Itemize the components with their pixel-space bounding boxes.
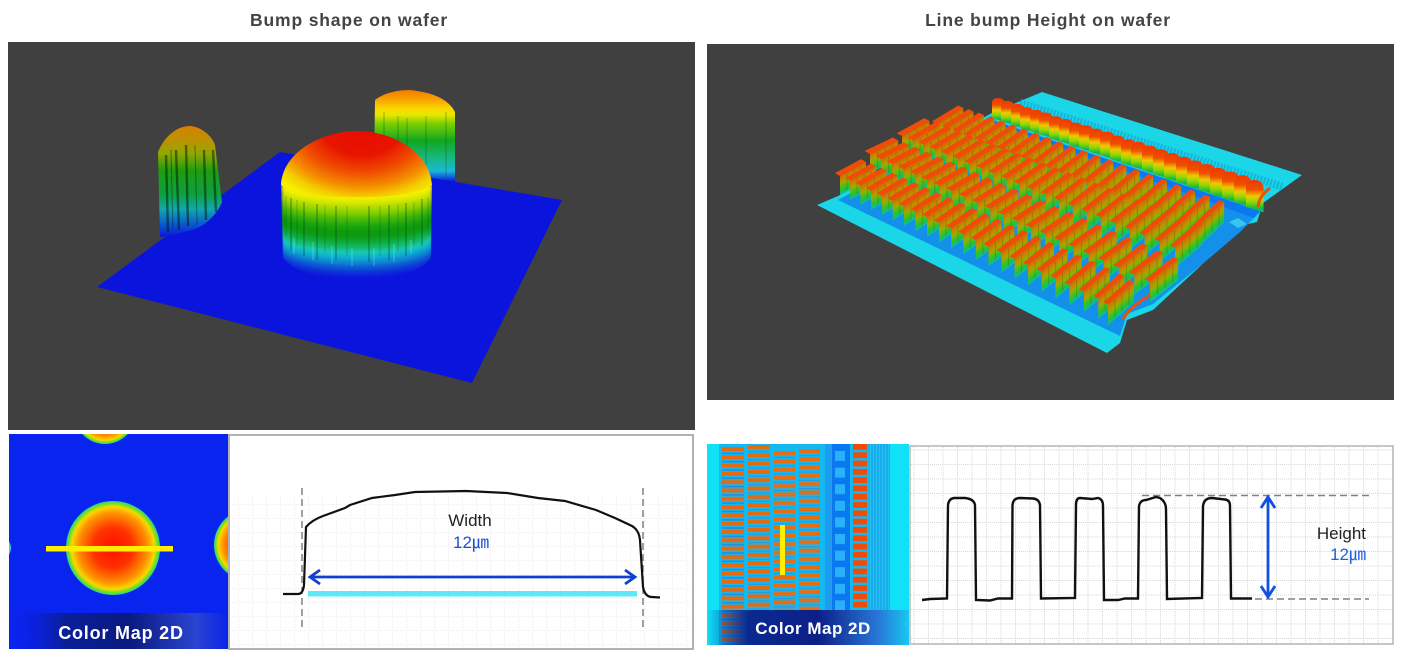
orange bump columns [722,445,820,645]
height guide lines [1142,496,1369,599]
end curl, top row [1258,188,1270,207]
yellow scan line [46,546,173,552]
panel: 3D view of line bumps on wafer [707,44,1394,400]
label band [707,610,909,645]
panel: bump color map 2D [9,434,228,649]
value: 12 um: 12㎛ [1330,545,1366,565]
label band [9,613,228,649]
dotted trace area [869,444,890,645]
cyan base bar [308,591,637,596]
blue recessed area [838,116,1262,336]
top bump row [992,98,1264,212]
centre bump disc [66,501,160,595]
panel: line bump color map 2D [707,444,909,645]
pad row [981,125,1247,228]
chart: bump width profile [229,435,693,649]
pad band [825,444,850,645]
yellow scan line [780,525,785,575]
label: height: Height [1317,524,1366,543]
large centre bump [281,131,432,276]
label: color map 2D: Color Map 2D [58,623,184,643]
title: line bump height on wafer: Line bump Height on wafer [925,10,1171,30]
back bump [374,90,455,182]
end curl, front row [1123,295,1150,319]
blue wafer plate [97,152,562,383]
height arrow [1261,497,1275,597]
dotted trace strip [1020,103,1283,187]
label: color map 2D: Color Map 2D [755,619,871,638]
width guide lines [302,488,643,627]
chart: line bump height profile [910,446,1393,644]
square wave profile [922,497,1252,600]
width arrow [310,570,635,584]
cyan wafer plate [817,92,1302,353]
orange pad column [853,444,867,645]
bright channel [985,116,1262,218]
left bump [158,126,222,237]
line bump array [835,80,1224,326]
partial bump discs [9,434,228,574]
title: bump shape on wafer: Bump shape on wafer [250,10,448,30]
panel: 3D view of bumps on wafer [8,42,695,430]
bump profile curve [283,491,660,598]
blue field [719,444,890,645]
label: width: Width [448,511,492,530]
value: 12 um: 12㎛ [453,533,489,553]
